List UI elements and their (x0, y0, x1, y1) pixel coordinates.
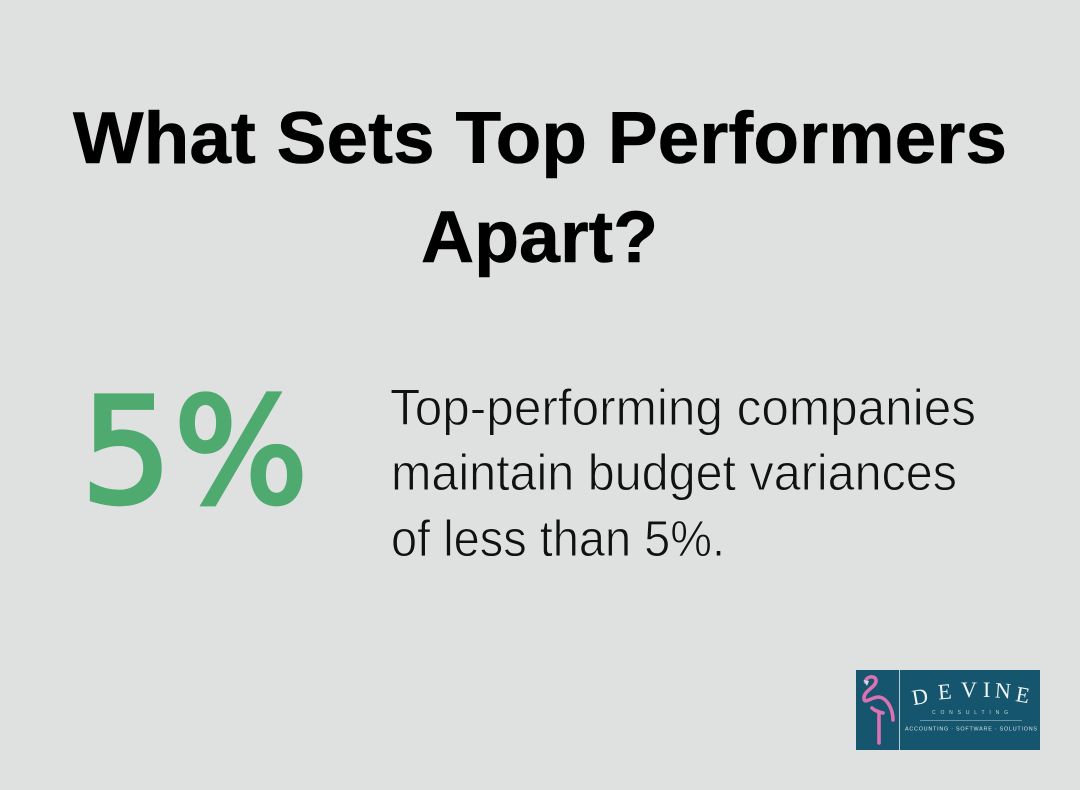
icon: flamingo beak (864, 680, 869, 686)
logo divider (899, 670, 900, 750)
description text: maintain budget variances (391, 444, 957, 501)
logo wordmark: E (1014, 681, 1032, 708)
description text (390, 379, 976, 567)
logo wordmark (910, 677, 1032, 710)
logo wordmark: I (983, 677, 990, 702)
logo subtitle: consulting: CONSULTING (932, 710, 1008, 716)
logo wordmark: E (937, 678, 952, 704)
title (73, 98, 1007, 278)
logo tagline: ACCOUNTING · SOFTWARE · SOLUTIONS (905, 726, 1037, 732)
logo wordmark: V (961, 677, 977, 702)
title: What Sets Top Performers (73, 98, 1007, 179)
logo: Devine Consulting (856, 670, 1040, 750)
logo wordmark: N (994, 677, 1012, 704)
big statistic: 5% (81, 367, 308, 537)
big statistic: 5%: 5 (81, 367, 172, 537)
title: Apart? (421, 197, 658, 278)
icon: flamingo (864, 677, 893, 743)
big statistic: 5%: % (174, 367, 308, 537)
description text: Top-performing companies (390, 379, 976, 436)
description text: of less than 5%. (391, 510, 725, 567)
logo rule (920, 719, 1022, 722)
logo wordmark: D (910, 683, 930, 710)
